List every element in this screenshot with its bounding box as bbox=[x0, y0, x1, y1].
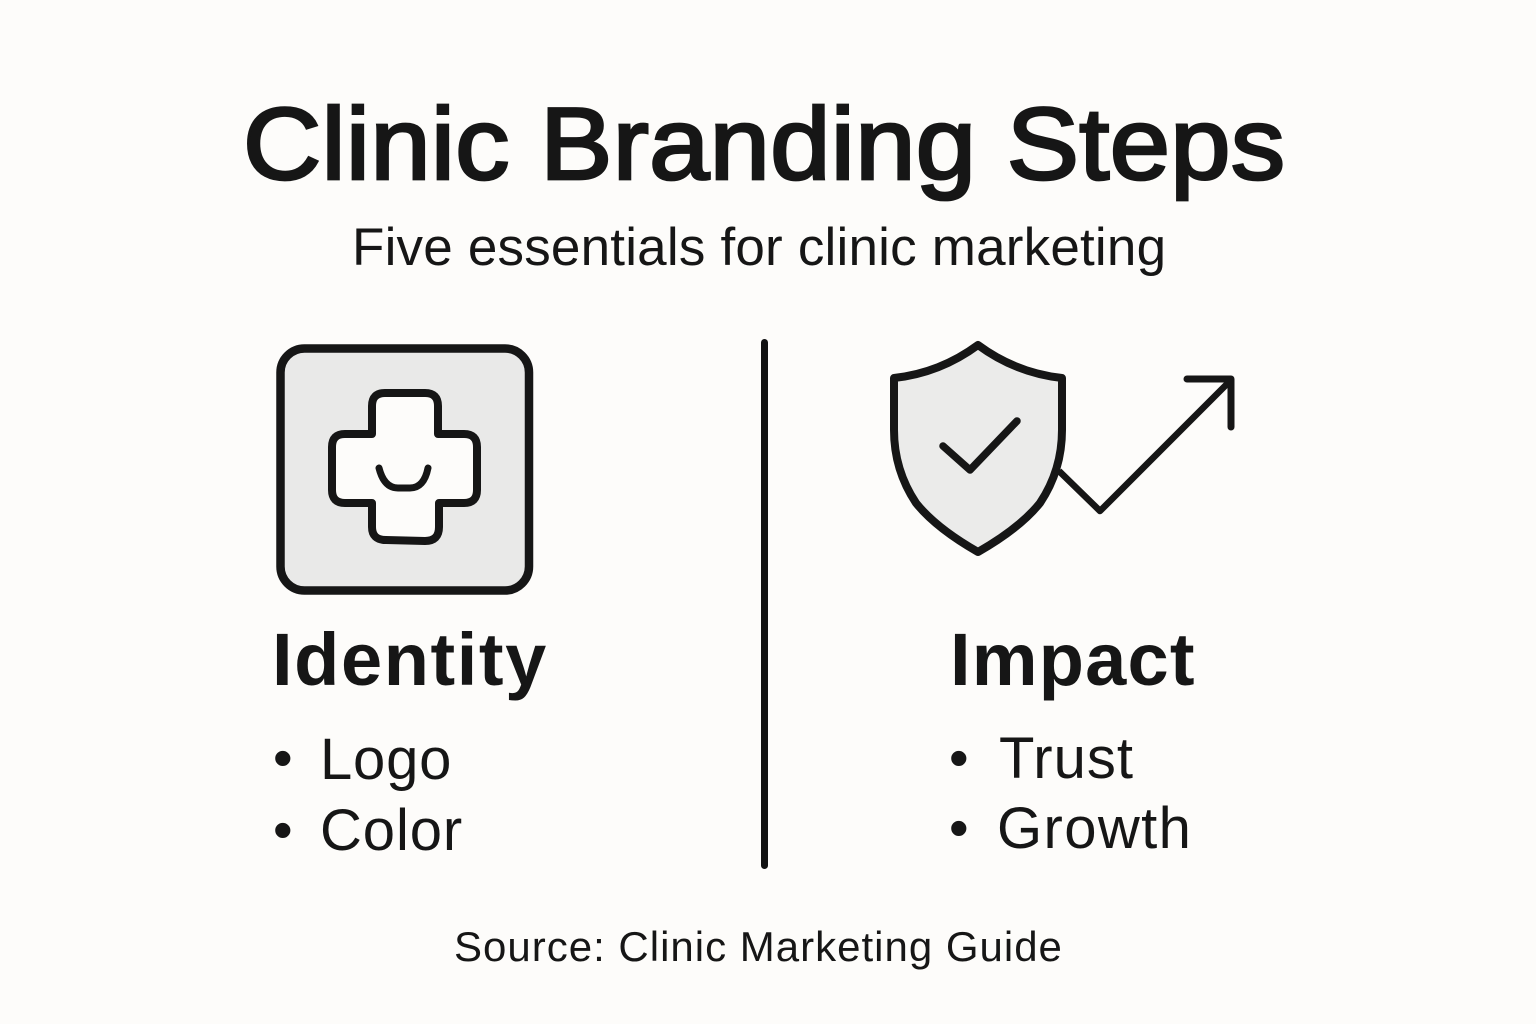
list: identity items: Color bbox=[320, 798, 463, 863]
heading: identity: Identity bbox=[272, 618, 548, 701]
list: identity items: • bbox=[273, 726, 293, 789]
list: impact items: Growth bbox=[997, 796, 1192, 861]
subtitle: Five essentials for clinic marketing bbox=[352, 218, 1166, 277]
list: impact items bbox=[949, 726, 1192, 861]
list: identity items: • bbox=[273, 798, 293, 861]
list: impact items: • bbox=[949, 726, 969, 789]
source note: Source: Clinic Marketing Guide bbox=[454, 923, 1063, 970]
heading: impact: Impact bbox=[950, 618, 1196, 701]
list: impact items: • bbox=[949, 796, 969, 859]
list: identity items bbox=[273, 726, 463, 863]
title: Clinic Branding Steps bbox=[243, 87, 1285, 201]
list: identity items: Logo bbox=[320, 727, 452, 792]
divider line bbox=[761, 339, 768, 869]
list: impact items: Trust bbox=[999, 726, 1134, 791]
